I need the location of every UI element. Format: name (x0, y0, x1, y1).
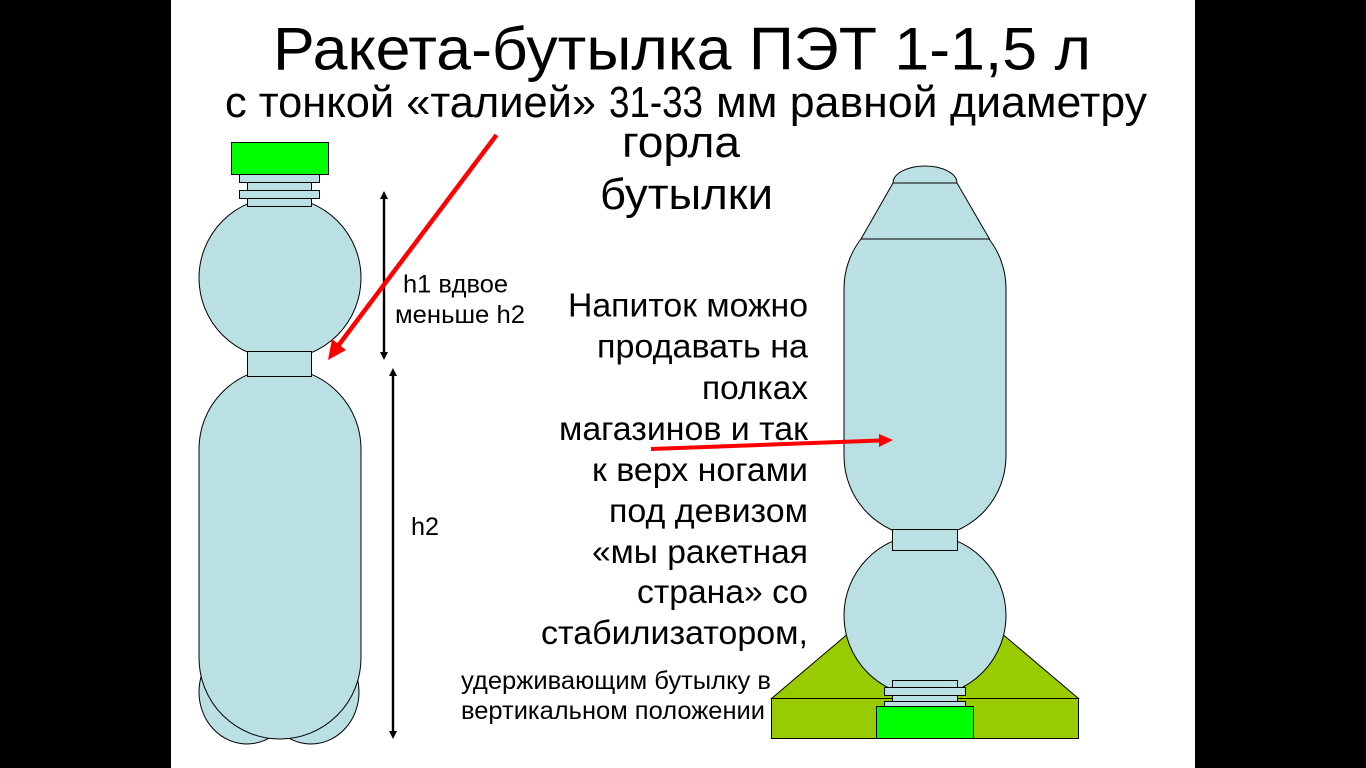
subtitle continuation: горла (622, 118, 741, 167)
right bottle nose cone (861, 183, 990, 239)
main description text: стабилизатором, (541, 615, 808, 652)
subtitle continuation: бутылки (600, 170, 773, 219)
h1 label: h1 вдвое (403, 270, 508, 298)
subtitle continuation (600, 118, 773, 219)
left bottle (199, 142, 361, 744)
left bottle upper sphere (199, 197, 361, 359)
small description text (461, 667, 771, 725)
subtitle: мм равной диаметру (716, 78, 1147, 127)
right bottle waist (892, 530, 958, 550)
small description text: вертикальном положении (461, 697, 765, 725)
right bottle sphere (844, 534, 1006, 696)
left bottle cap (232, 142, 328, 174)
right bottle neck rings (884, 680, 966, 708)
h1 label: меньше h2 (395, 301, 525, 329)
arrow: h2 dimension (389, 368, 397, 739)
title: Ракета-бутылка ПЭТ 1-1,5 л (273, 16, 1091, 82)
red arrow: to waist (328, 135, 496, 360)
left bottle waist (248, 352, 312, 376)
subtitle: 31-33 (609, 78, 703, 127)
subtitle (225, 78, 1147, 127)
right bottle (772, 166, 1078, 738)
h2 label: h2 (411, 513, 439, 541)
main description text: полках (702, 370, 808, 407)
subtitle: с тонкой «талией» (225, 78, 596, 127)
main description text: «мы ракетная (592, 534, 808, 571)
left bottle neck rings (240, 174, 320, 206)
stabilizer base (772, 698, 1078, 738)
arrow: h1 dimension (380, 191, 388, 360)
main description text: к верх ногами (592, 452, 808, 489)
main description text: под девизом (609, 493, 808, 530)
main description text: страна» со (637, 574, 808, 611)
h1 label (395, 270, 525, 329)
left bottle lower body (199, 368, 361, 739)
right bottle body (844, 239, 1006, 537)
main description text (541, 288, 808, 652)
main description text: Напиток можно (568, 288, 808, 324)
stabilizer fins (772, 632, 1078, 698)
right bottle cap (876, 706, 974, 738)
right bottle nose dome (893, 166, 957, 183)
red arrow: to right bottle (651, 434, 893, 449)
main description text: магазинов и так (559, 411, 808, 448)
left bottle feet (199, 640, 359, 744)
main description text: продавать на (597, 328, 808, 366)
small description text: удерживающим бутылку в (461, 667, 771, 695)
